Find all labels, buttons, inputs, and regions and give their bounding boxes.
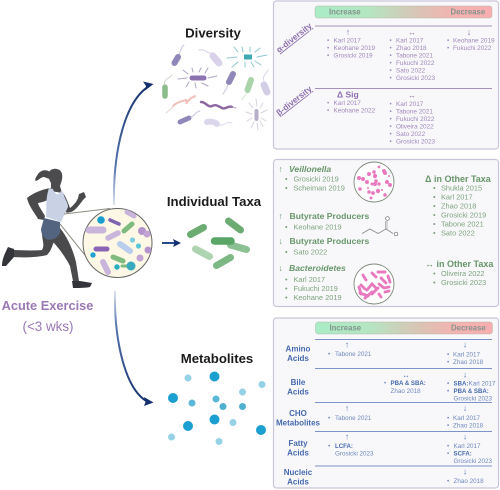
- butyrate producers increase: Keohane 2019: [294, 222, 342, 232]
- beta no change list: ↔: [408, 91, 416, 100]
- arrow: to diversity: [114, 82, 154, 205]
- icon: green rods: [190, 221, 246, 266]
- alpha increase list: ↑: [346, 27, 350, 37]
- amino acids row: [286, 340, 484, 366]
- nucleic acids row: Acids: [287, 478, 309, 486]
- other taxa change: Shukla 2015: [441, 184, 482, 192]
- bile acids row: Karl 2017: [468, 380, 496, 388]
- Veillonella increase: Grosicki 2019: [294, 174, 339, 184]
- nucleic acids row: [284, 466, 484, 486]
- beta significant list: Keohane 2022: [334, 108, 376, 114]
- fatty acids row: ↓: [463, 432, 467, 442]
- alpha decrease list: Keohane 2019: [453, 38, 495, 44]
- CHO metabolites row: [276, 403, 484, 430]
- alpha no change list: [390, 28, 436, 82]
- butyrate producers decrease: Sato 2022: [294, 248, 327, 256]
- increase/decrease bar: [316, 322, 492, 334]
- fatty acids row: Fatty: [288, 439, 308, 448]
- fatty acids row: Grosicki 2023: [454, 458, 492, 465]
- amino acids row: Tabone 2021: [335, 351, 372, 358]
- icon: diverse bacteria: [164, 45, 268, 130]
- bile acids row: SBA:: [454, 380, 468, 388]
- arrow: to individual taxa: [162, 239, 181, 247]
- butyrate producers decrease: [278, 236, 369, 256]
- CHO metabolites row: Karl 2017: [453, 415, 480, 422]
- butyrate producers increase: [278, 211, 369, 232]
- other taxa change: [425, 174, 492, 238]
- Veillonella increase: •: [285, 184, 288, 192]
- Veillonella increase: Scheiman 2019: [294, 184, 345, 192]
- alpha decrease list: •: [447, 38, 449, 44]
- alpha increase list: [327, 27, 376, 60]
- alpha increase list: Karl 2017: [334, 38, 361, 44]
- beta no change list: •: [390, 131, 392, 138]
- other taxa no change: •: [433, 269, 436, 278]
- butyrate producers decrease: •: [285, 248, 288, 256]
- front shoe: [72, 281, 92, 288]
- beta significant list: [327, 90, 376, 114]
- icon: Veillonella petri dish: [354, 162, 394, 202]
- bile acids row: Zhao 2018: [390, 388, 421, 395]
- amino acids row: ↑: [345, 340, 349, 350]
- nucleic acids row: ↓: [463, 466, 467, 476]
- other taxa no change: [425, 259, 494, 287]
- beta significant list: •: [327, 100, 329, 107]
- amino acids row: Zhao 2018: [453, 359, 484, 366]
- alpha diversity label: α-diversity: [274, 20, 314, 55]
- increase/decrease bar: Decrease: [450, 8, 486, 16]
- head: [49, 169, 62, 193]
- alpha increase list: Keohane 2019: [334, 45, 376, 52]
- butyrate producers increase: •: [285, 222, 288, 232]
- fatty acids row: ↑: [345, 432, 349, 442]
- Bacteroidetes decrease: •: [285, 284, 288, 293]
- other taxa no change: Oliveira 2022: [441, 269, 485, 278]
- bile acids row: Grosicki 2023: [454, 396, 492, 402]
- other taxa change: Sato 2022: [441, 228, 475, 238]
- beta significant list: •: [327, 108, 329, 114]
- shorts: [41, 218, 60, 240]
- amino acids row: ↓: [463, 340, 467, 350]
- nucleic acids row: Nucleic: [284, 468, 313, 477]
- fatty acids row: Acids: [287, 448, 309, 458]
- CHO metabolites row: CHO: [289, 409, 307, 418]
- other taxa change: •: [433, 228, 436, 238]
- panel: diversity: [274, 1, 498, 149]
- heading: Metabolites: Metabolites: [181, 351, 253, 366]
- Bacteroidetes decrease: ↓: [278, 263, 283, 273]
- bile acids row: •: [384, 380, 386, 387]
- butyrate producers decrease: Butyrate Producers: [290, 236, 369, 246]
- CHO metabolites row: ↑: [345, 403, 349, 413]
- beta no change list: [390, 91, 436, 146]
- Veillonella increase: [278, 164, 345, 192]
- beta no change list: Tabone 2021: [396, 108, 433, 116]
- amino acids row: Acids: [287, 354, 309, 363]
- label: Acute Exercise: [2, 298, 93, 334]
- other taxa change: •: [433, 192, 436, 202]
- alpha no change list: •: [390, 38, 392, 44]
- alpha decrease list: Fukuchi 2022: [453, 45, 492, 52]
- alpha no change list: ↔: [408, 28, 416, 37]
- beta no change list: •: [390, 101, 392, 108]
- beta significant list: Δ Sig: [337, 90, 359, 100]
- fatty acids row: Karl 2017: [454, 443, 481, 450]
- icon: metabolite dots: [168, 372, 266, 445]
- amino acids row: •: [447, 359, 449, 366]
- heading: Individual Taxa: Individual Taxa: [167, 194, 262, 209]
- bile acids row: Acids: [287, 388, 309, 396]
- butyrate producers increase: ↑: [278, 211, 283, 221]
- alpha no change list: Zhao 2018: [396, 45, 427, 52]
- bile acids row: ↔: [402, 370, 410, 380]
- fatty acids row: •: [447, 443, 449, 450]
- other taxa change: •: [433, 210, 436, 220]
- alpha increase list: •: [327, 45, 329, 52]
- fatty acids row: •: [328, 443, 330, 450]
- beta no change list: •: [390, 138, 392, 146]
- back leg: [13, 233, 55, 257]
- increase/decrease bar: Decrease: [451, 324, 486, 332]
- label: Acute Exercise: Acute Exercise: [2, 298, 93, 313]
- alpha decrease list: •: [447, 45, 449, 52]
- beta no change list: •: [390, 116, 392, 123]
- other taxa change: •: [433, 202, 436, 210]
- Bacteroidetes decrease: Keohane 2019: [294, 293, 342, 302]
- front arm: [62, 192, 86, 213]
- beta no change list: Fukuchi 2022: [396, 116, 435, 123]
- alpha decrease list: [447, 27, 495, 52]
- Veillonella increase: •: [285, 174, 288, 184]
- beta no change list: Grosicki 2023: [396, 138, 436, 146]
- fatty acids row: LCFA:: [335, 443, 353, 450]
- alpha no change list: Karl 2017: [396, 38, 424, 44]
- bile acids row: [287, 370, 496, 402]
- alpha no change list: •: [390, 45, 392, 52]
- CHO metabolites row: Zhao 2018: [453, 422, 484, 430]
- Bacteroidetes decrease: Bacteroidetes: [289, 263, 346, 273]
- panel: individual taxa: [274, 160, 498, 306]
- runner figure: [2, 169, 92, 288]
- other taxa change: Zhao 2018: [441, 202, 476, 210]
- CHO metabolites row: ↓: [463, 403, 467, 413]
- CHO metabolites row: •: [447, 422, 449, 430]
- beta diversity label: β-diversity: [274, 83, 314, 118]
- alpha increase list: •: [327, 52, 329, 60]
- Bacteroidetes decrease: •: [285, 275, 288, 284]
- ponytail: [35, 170, 50, 181]
- bile acids row: PBA & SBA:: [454, 388, 489, 395]
- other taxa no change: ↔ in Other Taxa: [425, 259, 494, 269]
- beta no change list: Karl 2017: [396, 101, 424, 108]
- icon: Bacteroidetes petri dish: [354, 264, 394, 304]
- alpha increase list: Grosicki 2019: [334, 52, 373, 60]
- beta no change list: •: [390, 108, 392, 116]
- back arm: [27, 188, 51, 220]
- zoomed microbiome circle: [83, 208, 152, 278]
- other taxa change: Karl 2017: [441, 192, 473, 202]
- arrow: to metabolites: [115, 291, 154, 406]
- Bacteroidetes decrease: [278, 263, 346, 302]
- fatty acids row: [287, 432, 492, 465]
- other taxa no change: Grosicki 2023: [441, 278, 486, 287]
- CHO metabolites row: Tabone 2021: [335, 415, 372, 422]
- bile acids row: Bile: [291, 378, 306, 387]
- beta no change list: •: [390, 124, 392, 130]
- fatty acids row: SCFA:: [454, 450, 472, 458]
- Bacteroidetes decrease: Fukuchi 2019: [294, 284, 338, 293]
- tank top: [46, 188, 68, 222]
- amino acids row: Amino: [286, 344, 311, 354]
- nucleic acids row: Zhao 2018: [454, 478, 484, 485]
- CHO metabolites row: Metabolites: [276, 418, 321, 428]
- CHO metabolites row: •: [328, 415, 330, 422]
- amino acids row: Karl 2017: [453, 352, 480, 358]
- alpha no change list: Grosicki 2023: [396, 75, 436, 82]
- increase/decrease bar: Increase: [329, 8, 361, 16]
- Veillonella increase: ↑: [278, 164, 283, 174]
- other taxa change: •: [433, 184, 436, 192]
- label: Acute Exercise: (<3 wks): [23, 319, 73, 334]
- front leg: [48, 228, 79, 281]
- fatty acids row: Grosicki 2023: [335, 450, 374, 458]
- beta no change list: Sato 2022: [396, 131, 426, 138]
- alpha no change list: •: [390, 75, 392, 82]
- increase/decrease bar: [315, 6, 492, 18]
- other taxa change: •: [433, 220, 436, 228]
- Bacteroidetes decrease: Karl 2017: [294, 275, 325, 284]
- bile acids row: ↓: [463, 370, 467, 380]
- alpha decrease list: ↓: [467, 27, 471, 37]
- beta significant list: Karl 2017: [334, 100, 361, 107]
- butyrate producers decrease: ↓: [278, 236, 283, 246]
- alpha no change list: •: [390, 60, 392, 67]
- alpha no change list: •: [390, 68, 392, 74]
- Veillonella increase: Veillonella: [289, 164, 331, 174]
- other taxa change: Grosicki 2019: [441, 210, 486, 220]
- panel: metabolites: [274, 318, 498, 488]
- bile acids row: PBA & SBA:: [390, 380, 426, 387]
- other taxa change: Tabone 2021: [441, 220, 484, 228]
- heading: Diversity: Diversity: [185, 26, 242, 40]
- amino acids row: •: [447, 352, 449, 358]
- bile acids row: •: [447, 388, 449, 395]
- other taxa change: Δ in Other Taxa: [425, 174, 492, 184]
- icon: butyrate molecule: [362, 217, 398, 236]
- alpha no change list: Tabone 2021: [396, 52, 433, 60]
- increase/decrease bar: Increase: [330, 324, 362, 332]
- fatty acids row: •: [447, 450, 449, 458]
- back shoe: [2, 247, 14, 266]
- alpha no change list: •: [390, 52, 392, 60]
- nucleic acids row: •: [447, 478, 449, 485]
- beta no change list: Oliveira 2022: [396, 124, 434, 130]
- other taxa no change: •: [433, 278, 436, 287]
- Bacteroidetes decrease: •: [285, 293, 288, 302]
- alpha increase list: •: [327, 38, 329, 44]
- butyrate producers increase: Butyrate Producers: [290, 211, 369, 221]
- alpha no change list: Sato 2022: [396, 68, 426, 74]
- amino acids row: •: [328, 351, 330, 358]
- alpha no change list: Fukuchi 2022: [396, 60, 435, 67]
- magnifier lines: [60, 208, 110, 270]
- bile acids row: •: [447, 380, 449, 388]
- CHO metabolites row: •: [447, 415, 449, 422]
